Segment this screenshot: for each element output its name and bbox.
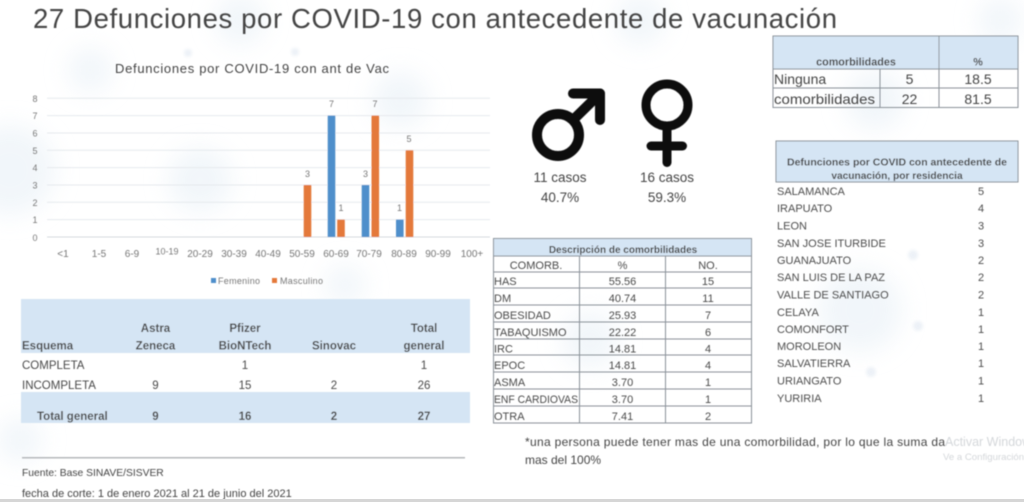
row: incompleta: INCOMPLETA (22, 380, 96, 392)
row: total general: Total general (37, 411, 108, 423)
rows: 25.93 (609, 310, 636, 322)
x axis labels: 60-69 (323, 249, 349, 260)
rows: VALLE DE SANTIAGO (777, 290, 889, 302)
bar value labels: 7 (329, 99, 334, 109)
row: total general: 27 (418, 411, 430, 423)
male stats: 11 casos (533, 170, 587, 185)
rows: SALAMANCA (777, 186, 846, 198)
rows: SAN LUIS DE LA PAZ (777, 272, 885, 284)
rows: 7.41 (612, 411, 633, 423)
rows: 2 (978, 255, 984, 267)
table header: BioNTech (219, 340, 271, 352)
rows: TABAQUISMO (494, 327, 567, 339)
rows: 7 (705, 310, 711, 322)
y axis labels: 1 (32, 215, 38, 225)
table header: Astra (141, 323, 171, 335)
footnote: *una persona puede tener mas de una comorbilidad, por lo que la suma da (525, 435, 945, 449)
rows: 14.81 (609, 344, 636, 356)
row: completa: 1 (421, 360, 427, 372)
rows: CELAYA (777, 307, 819, 319)
bar value labels: 3 (363, 169, 368, 179)
table header: general (404, 340, 444, 352)
bars: femenino (328, 116, 404, 237)
table header: Esquema (22, 340, 74, 352)
x axis labels: 1-5 (92, 249, 107, 260)
row: total general (37, 411, 430, 423)
rows: OBESIDAD (494, 310, 551, 322)
rows: 4 (705, 344, 711, 356)
table header (22, 323, 444, 352)
rows: 3.70 (612, 377, 633, 389)
header (816, 56, 983, 68)
title: 27 Defunciones por COVID-19 con antecedente de vacunación (33, 3, 837, 34)
rows: 3 (978, 238, 984, 250)
rows: 15 (702, 276, 714, 288)
y axis labels: 3 (32, 180, 38, 190)
rows (777, 186, 984, 405)
footnote (525, 435, 945, 467)
bars: masculino (304, 116, 413, 237)
y axis labels: 2 (32, 198, 38, 208)
row: completa: 1 (242, 360, 248, 372)
table: comorbidity description (494, 238, 752, 423)
header: comorbilidades (816, 56, 896, 68)
activation watermark: Ve a Configuración (943, 452, 1024, 463)
footnote: mas del 100% (525, 453, 601, 467)
x axis labels: 100+ (461, 249, 483, 260)
rows: 1 (978, 324, 984, 336)
column heads (510, 260, 718, 272)
rows: YURIRIA (777, 393, 822, 405)
row: incompleta: 2 (331, 380, 337, 392)
rows: 1 (978, 393, 984, 405)
rows: EPOC (494, 360, 525, 372)
rows (494, 276, 714, 423)
rows: COMONFORT (777, 324, 849, 336)
row: ninguna (774, 71, 992, 87)
x axis labels: 90-99 (425, 249, 451, 260)
rows: 4 (705, 360, 711, 372)
male stats: 40.7% (541, 190, 579, 205)
row: comorbilidades: comorbilidades (774, 91, 875, 107)
rows: 3 (978, 220, 984, 232)
rows: MOROLEON (777, 341, 841, 353)
table: comorbidities summary (773, 36, 1018, 108)
table header: Pfizer (229, 323, 261, 335)
legend: Femenino (218, 276, 260, 286)
y axis labels: 0 (32, 233, 38, 243)
row: incompleta (22, 380, 430, 392)
rows: 5 (978, 186, 984, 198)
rows: SAN JOSE ITURBIDE (777, 238, 886, 250)
rows: 40.74 (609, 293, 636, 305)
row: ninguna: Ninguna (774, 71, 826, 87)
rows: 11 (702, 293, 714, 305)
row: incompleta: 15 (239, 380, 251, 392)
column heads: COMORB. (510, 260, 562, 272)
row: completa: COMPLETA (22, 360, 85, 372)
bar chart: deaths by age group and sex (32, 61, 490, 286)
rows: DM (494, 293, 511, 305)
x axis labels: 20-29 (187, 249, 213, 260)
female stats: 59.3% (648, 190, 686, 205)
rows: 2 (705, 411, 711, 423)
source note: fecha de corte: 1 de enero 2021 al 21 de junio del 2021 (22, 488, 292, 500)
rows: HAS (494, 276, 517, 288)
header: Defunciones por COVID con antecedente de (787, 158, 1007, 168)
rows: 3.70 (612, 394, 633, 406)
legend (211, 276, 323, 286)
rows: 2 (978, 272, 984, 284)
row: completa (22, 360, 427, 372)
female stats (640, 170, 694, 205)
x axis labels: <1 (57, 249, 69, 260)
table: deaths by residence (776, 141, 1018, 405)
bar value labels (305, 99, 412, 213)
rows: 1 (978, 358, 984, 370)
rows: URIANGATO (777, 376, 842, 388)
bar value labels: 1 (397, 203, 402, 213)
icon: female symbol (646, 84, 688, 162)
row: total general: 2 (331, 411, 337, 423)
table header: Sinovac (312, 340, 357, 352)
rows: ENF CARDIOVAS (494, 394, 578, 406)
x axis labels (57, 246, 483, 260)
header: % (973, 56, 983, 68)
column heads: % (618, 260, 628, 272)
rows: ASMA (494, 377, 526, 389)
row: incompleta: 26 (418, 380, 430, 392)
x axis labels: 10-19 (155, 246, 179, 256)
x axis labels: 30-39 (221, 249, 247, 260)
header: Descripción de comorbilidades (549, 245, 698, 256)
x axis labels: 40-49 (255, 249, 281, 260)
source note (22, 458, 465, 500)
rows: 1 (978, 376, 984, 388)
bar value labels: 5 (406, 134, 412, 144)
y axis labels (32, 94, 38, 243)
bottom edge band (0, 499, 1024, 502)
rows: 1 (705, 377, 711, 389)
row: ninguna: 18.5 (964, 71, 992, 87)
y axis labels: 8 (32, 94, 38, 104)
male stats (533, 170, 587, 205)
y axis labels: 5 (32, 146, 38, 156)
rows: IRAPUATO (777, 203, 833, 215)
rows: 55.56 (609, 276, 636, 288)
rows: 1 (978, 307, 984, 319)
female stats: 16 casos (640, 170, 694, 185)
row: total general: 9 (152, 411, 159, 423)
rows: 14.81 (609, 360, 636, 372)
row: comorbilidades (774, 91, 992, 107)
rows: 4 (978, 203, 984, 215)
rows: 6 (705, 327, 711, 339)
source note: Fuente: Base SINAVE/SISVER (22, 468, 164, 479)
row: comorbilidades: 81.5 (964, 91, 992, 107)
bar value labels: 7 (372, 99, 378, 109)
x axis labels: 6-9 (125, 249, 140, 260)
rows: 22.22 (609, 327, 636, 339)
rows: SALVATIERRA (777, 358, 851, 370)
x axis labels: 50-59 (289, 249, 315, 260)
bar value labels: 1 (338, 203, 344, 213)
legend: Masculino (280, 276, 323, 286)
bar value labels: 3 (305, 169, 310, 179)
y axis labels: 7 (32, 111, 38, 121)
table header: Zeneca (136, 340, 176, 352)
rows: OTRA (494, 411, 525, 423)
x axis labels: 70-79 (356, 249, 382, 260)
row: ninguna: 5 (906, 71, 914, 87)
table: vaccine scheme (21, 299, 470, 423)
chart title: Defunciones por COVID-19 con ant de Vac (115, 61, 390, 76)
rows: 2 (978, 290, 984, 302)
row: comorbilidades: 22 (902, 91, 917, 107)
row: incompleta: 9 (152, 380, 159, 392)
rows: 1 (978, 341, 984, 353)
y axis labels: 4 (32, 163, 38, 173)
activation watermark (943, 435, 1024, 463)
table header: Total (411, 323, 437, 335)
column heads: NO. (698, 260, 718, 272)
row: total general: 16 (239, 411, 251, 423)
x axis labels: 80-89 (391, 249, 417, 260)
rows: 1 (705, 394, 711, 406)
y axis labels: 6 (32, 128, 38, 138)
rows: LEON (777, 220, 807, 232)
icon: male symbol (537, 94, 600, 156)
header (787, 158, 1007, 182)
rows: IRC (494, 344, 513, 356)
header: vacunación, por residencia (831, 171, 963, 182)
rows: GUANAJUATO (777, 255, 852, 267)
